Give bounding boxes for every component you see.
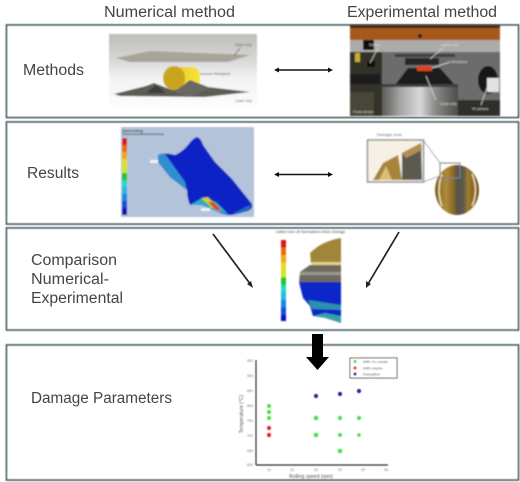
image: simulation damage contour: Quenching	[122, 128, 143, 133]
image: experimental rig photo: IR camera	[472, 107, 488, 111]
image: numerical model: Lower ship	[235, 99, 252, 103]
arrow: numerical to experimental	[274, 68, 333, 72]
label: results: Results	[27, 165, 79, 182]
scatter chart: 20	[314, 468, 318, 472]
scatter chart: 25	[338, 468, 342, 472]
scatter chart: Temperature (°C)	[239, 394, 245, 433]
scatter chart: 900	[247, 374, 253, 378]
scatter chart: 10	[267, 468, 271, 472]
scatter chart: 30	[361, 468, 365, 472]
image: experimental rig photo	[350, 25, 500, 116]
scatter chart: 950	[247, 359, 253, 363]
scatter chart: 800	[247, 404, 253, 408]
panel: comparison	[6, 228, 518, 330]
image: numerical model: Workpiece	[214, 72, 231, 76]
image: half simulation, half photo overlay: Lattart zone ofr Normalized Uhrize Damage	[276, 230, 345, 234]
chart legend	[350, 358, 397, 378]
scatter chart: 15	[290, 468, 294, 472]
label: damage parameters: Damage Parameters	[31, 390, 172, 407]
panel: methods	[6, 25, 518, 118]
image: damage zone photo: Damage zone	[377, 132, 403, 137]
scatter chart: 850	[247, 389, 253, 393]
column heading: numerical method: Numerical method	[104, 4, 235, 21]
scatter chart: 700	[247, 434, 253, 438]
image: experimental rig photo: Lower ship	[440, 102, 457, 106]
chart legend: With no cracks	[363, 360, 388, 364]
image: half simulation, half photo overlay	[276, 230, 345, 323]
label: methods: Methods	[23, 62, 84, 79]
arrow: simulation to photo	[274, 172, 333, 177]
image: experimental rig photo: Force sensor	[353, 110, 374, 114]
image: numerical model: Upper ship	[235, 43, 252, 47]
image: experimental rig photo: Sensor	[369, 43, 381, 47]
image: experimental rig photo: Upper ship	[441, 43, 458, 47]
image: numerical model	[109, 34, 257, 106]
image: experimental rig photo: Workpiece	[451, 60, 468, 64]
label: comparison numerical-experimental: Numerical-	[31, 271, 109, 288]
column heading: experimental method: Experimental method	[347, 4, 497, 21]
image: damage zone photo	[368, 132, 479, 215]
panel: damage parameters	[6, 345, 518, 480]
chart legend: Disruption	[363, 372, 380, 376]
scatter chart: 650	[247, 449, 253, 453]
scatter chart	[239, 358, 397, 480]
arrow: experimental result to comparison	[366, 232, 399, 288]
scatter chart: Rolling speed (rpm)	[289, 474, 333, 480]
arrow: large down arrow to damage parameters	[306, 334, 329, 370]
scatter chart: 35	[384, 468, 388, 472]
panel: results	[6, 122, 518, 224]
arrow: numerical result to comparison	[213, 234, 253, 288]
label: comparison numerical-experimental: Experimental	[31, 290, 123, 307]
scatter chart: 750	[247, 419, 253, 423]
chart legend: With cracks	[363, 366, 383, 370]
image: simulation damage contour	[121, 127, 254, 217]
scatter chart: 600	[247, 463, 253, 467]
label: comparison numerical-experimental	[31, 252, 123, 307]
label: comparison numerical-experimental: Comparison	[31, 252, 117, 269]
